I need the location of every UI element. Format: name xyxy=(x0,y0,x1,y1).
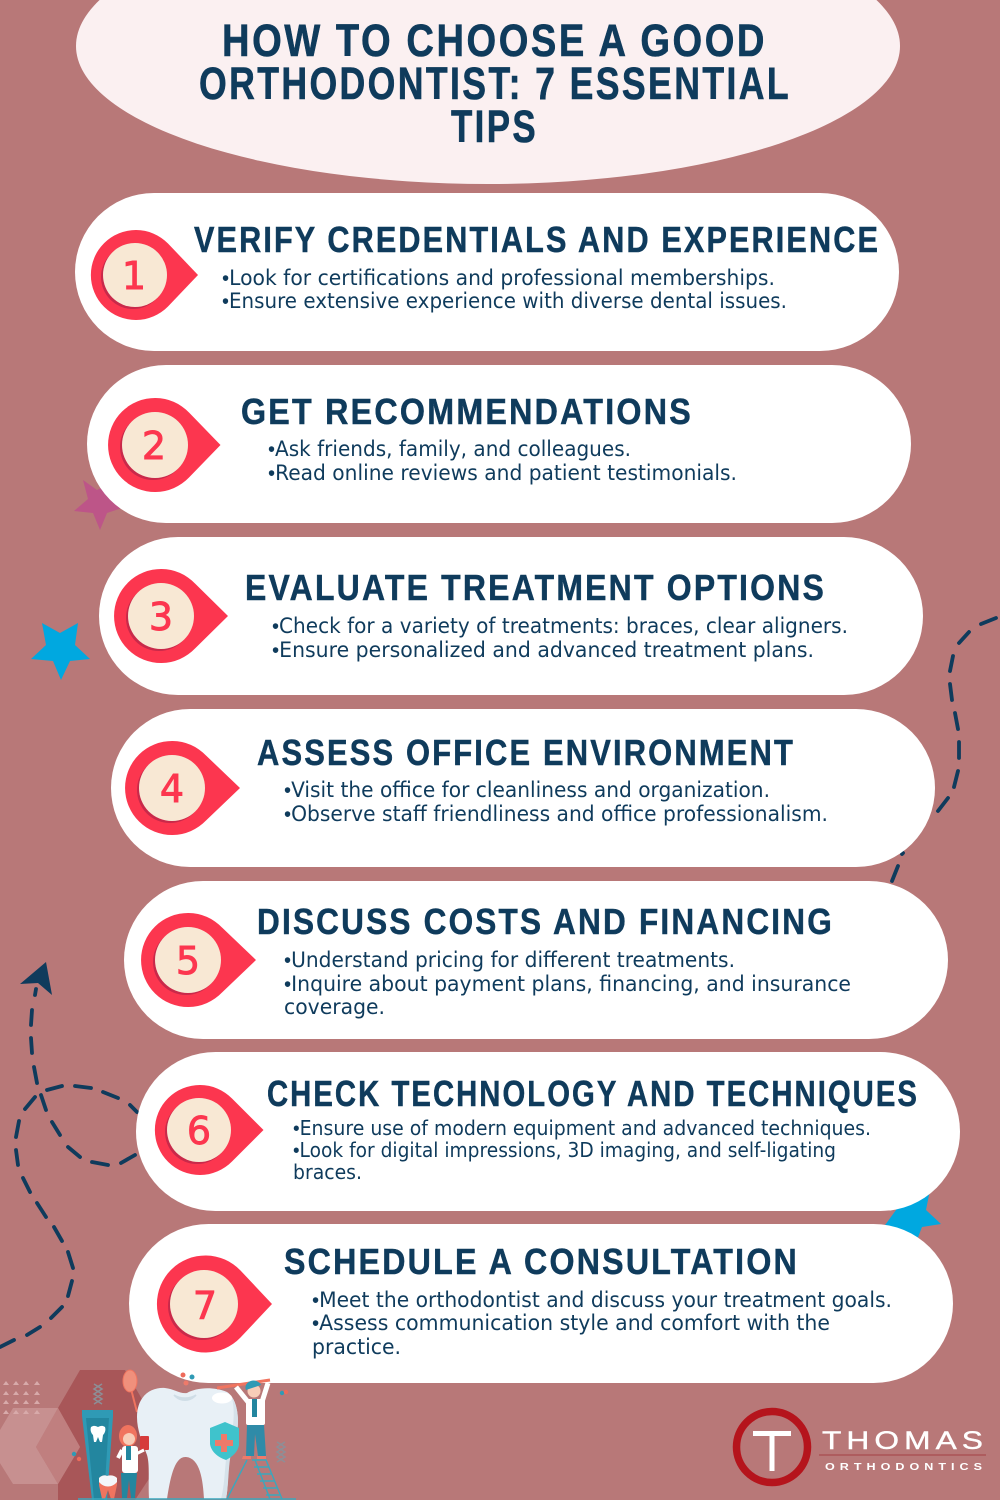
icon: ground line xyxy=(78,1498,296,1500)
marker 5 xyxy=(141,913,256,1007)
marker 2: 2 xyxy=(142,424,166,468)
body 4: •Observe staff friendliness and office professionalism. xyxy=(284,802,828,826)
icon: doctor on ladder xyxy=(236,1380,268,1459)
heading 5: DISCUSS COSTS AND FINANCING xyxy=(257,901,834,942)
panel: tip 5 xyxy=(124,881,948,1039)
icon: small doctor xyxy=(118,1425,149,1498)
marker 4: 4 xyxy=(160,767,184,811)
body 1: •Look for certifications and professional memberships. xyxy=(222,266,775,290)
heading 3: EVALUATE TREATMENT OPTIONS xyxy=(245,567,826,608)
body 2 xyxy=(268,437,737,485)
marker 3 xyxy=(114,569,228,663)
body 4: •Visit the office for cleanliness and organization. xyxy=(284,778,770,802)
marker 2 xyxy=(108,398,220,492)
heading 4: ASSESS OFFICE ENVIRONMENT xyxy=(257,732,795,773)
title banner xyxy=(76,0,900,184)
illustration: dental scene xyxy=(0,1370,296,1500)
panel: tip 7 xyxy=(129,1224,953,1383)
body 7 xyxy=(312,1288,892,1359)
body 5: •Understand pricing for different treatments. xyxy=(284,948,735,972)
body 3: •Check for a variety of treatments: braces, clear aligners. xyxy=(272,614,848,638)
marker 7: 7 xyxy=(193,1284,217,1328)
logo letter xyxy=(753,1431,791,1471)
icon: dental mirror xyxy=(123,1370,137,1412)
body 1: •Ensure extensive experience with diverse dental issues. xyxy=(222,289,787,313)
title: HOW TO CHOOSE A GOOD xyxy=(222,15,767,66)
marker 6: 6 xyxy=(187,1109,211,1153)
marker 5: 5 xyxy=(176,939,200,983)
icon: blue star right xyxy=(880,1190,941,1240)
heading 2: GET RECOMMENDATIONS xyxy=(241,391,693,432)
logo subtitle: ORTHODONTICS xyxy=(825,1462,987,1473)
heading 1: VERIFY CREDENTIALS AND EXPERIENCE xyxy=(194,219,880,260)
body 6 xyxy=(293,1116,871,1184)
body 2: •Ask friends, family, and colleagues. xyxy=(268,437,631,461)
heading 7: SCHEDULE A CONSULTATION xyxy=(284,1241,799,1282)
marker 4 xyxy=(125,741,240,835)
marker 1: 1 xyxy=(122,254,146,298)
icon: pink star xyxy=(74,478,125,530)
arrow: dashed path right xyxy=(892,618,996,881)
logo: Thomas Orthodontics xyxy=(736,1412,988,1482)
icon: toothpaste tube xyxy=(82,1410,113,1500)
marker 3: 3 xyxy=(149,595,173,639)
body 5 xyxy=(284,948,851,1019)
panel: tip 3 xyxy=(99,537,923,695)
icon: ladder xyxy=(227,1460,282,1499)
body 6: •Ensure use of modern equipment and advanced techniques. xyxy=(293,1116,871,1140)
panel: tip 4 xyxy=(111,709,935,867)
title: TIPS xyxy=(451,101,538,152)
icon: small tooth xyxy=(99,1475,117,1499)
marker 7 xyxy=(157,1256,272,1352)
body 3: •Ensure personalized and advanced treatment plans. xyxy=(272,638,814,662)
body 6: •Look for digital impressions, 3D imaging, and self-ligating xyxy=(293,1138,836,1162)
title xyxy=(199,15,791,152)
logo ring xyxy=(736,1412,808,1482)
marker 6 xyxy=(155,1085,264,1175)
body 7: •Assess communication style and comfort with the xyxy=(312,1311,830,1335)
body 4 xyxy=(284,778,828,826)
icon: shield xyxy=(210,1422,239,1460)
arrow: dashed path left xyxy=(0,962,137,1347)
background hexagons xyxy=(0,1370,170,1500)
body 2: •Read online reviews and patient testimonials. xyxy=(268,461,737,485)
body 7: practice. xyxy=(312,1335,401,1359)
icon: toothbrush xyxy=(217,1380,270,1388)
body 7: •Meet the orthodontist and discuss your treatment goals. xyxy=(312,1288,892,1312)
icon: blue star left xyxy=(31,623,90,680)
triangle dot grid xyxy=(3,1381,40,1414)
logo name: THOMAS xyxy=(822,1427,988,1455)
body 1 xyxy=(222,266,787,313)
icon: foam xyxy=(212,1392,232,1404)
body 5: •Inquire about payment plans, financing, and insurance xyxy=(284,972,851,996)
marker 1 xyxy=(91,230,198,320)
icon: DNA strands xyxy=(94,1384,285,1462)
panel: tip 2 xyxy=(87,365,911,523)
body 5: coverage. xyxy=(284,995,385,1019)
panel: tip 6 xyxy=(136,1052,960,1211)
title: ORTHODONTIST: 7 ESSENTIAL xyxy=(199,58,791,109)
icon: molecules xyxy=(72,1372,288,1461)
icon: large tooth xyxy=(137,1388,238,1499)
body 6: braces. xyxy=(293,1160,362,1184)
panel: tip 1 xyxy=(75,193,899,351)
body 3 xyxy=(272,614,848,662)
